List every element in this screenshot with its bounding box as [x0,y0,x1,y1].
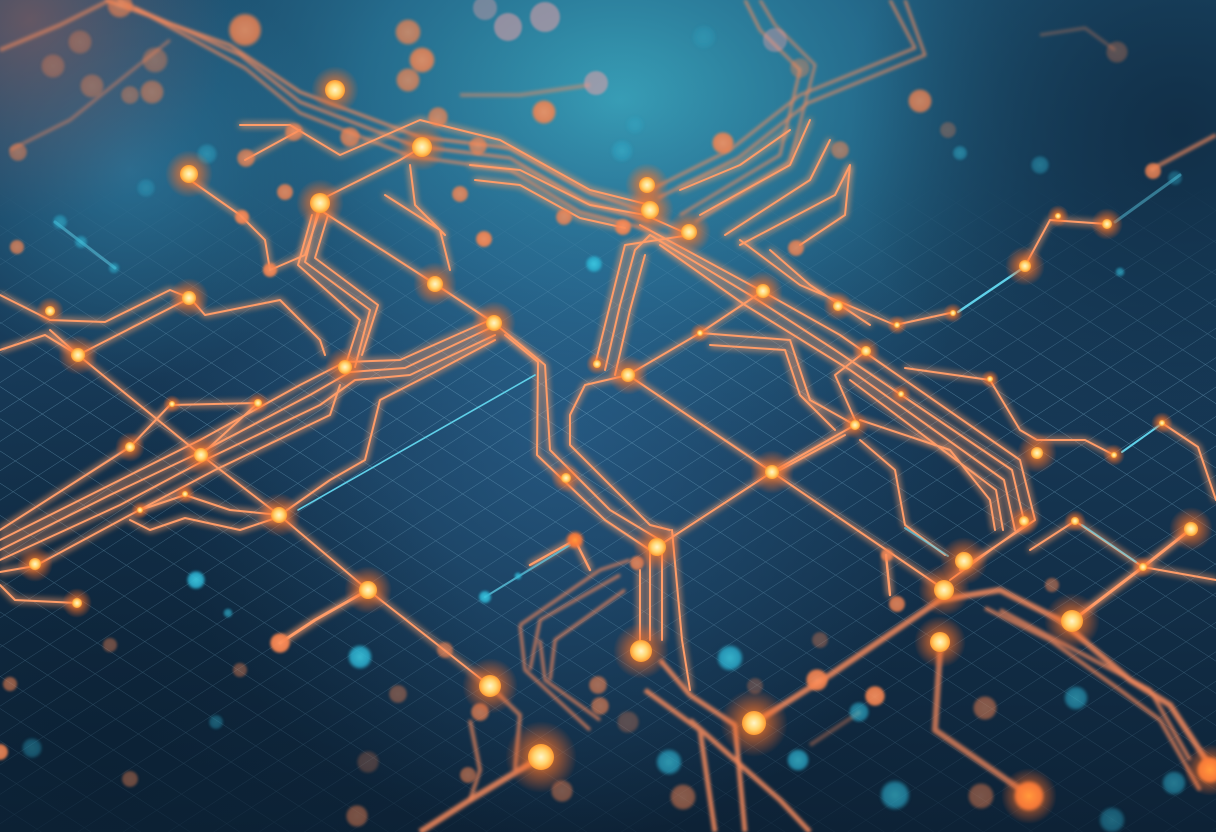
trace bundle: centre descending [494,323,690,690]
trace bundle: left column [298,203,494,367]
trace bundle: right diagonal [640,225,1035,580]
trace bundle: left diagonal [0,320,495,603]
node cores [29,80,1198,770]
trace bundle: centre rising [595,235,855,430]
trace bundle: upper centre [190,120,850,270]
main orange circuit traces [0,120,1216,690]
bokeh: pale pink top [473,0,787,95]
trace: right branch [895,220,1216,580]
cyan data lines [55,175,1180,597]
trace: centre cross [628,351,995,590]
trace: upper left branch [0,290,490,686]
perspective grid [0,212,1216,832]
